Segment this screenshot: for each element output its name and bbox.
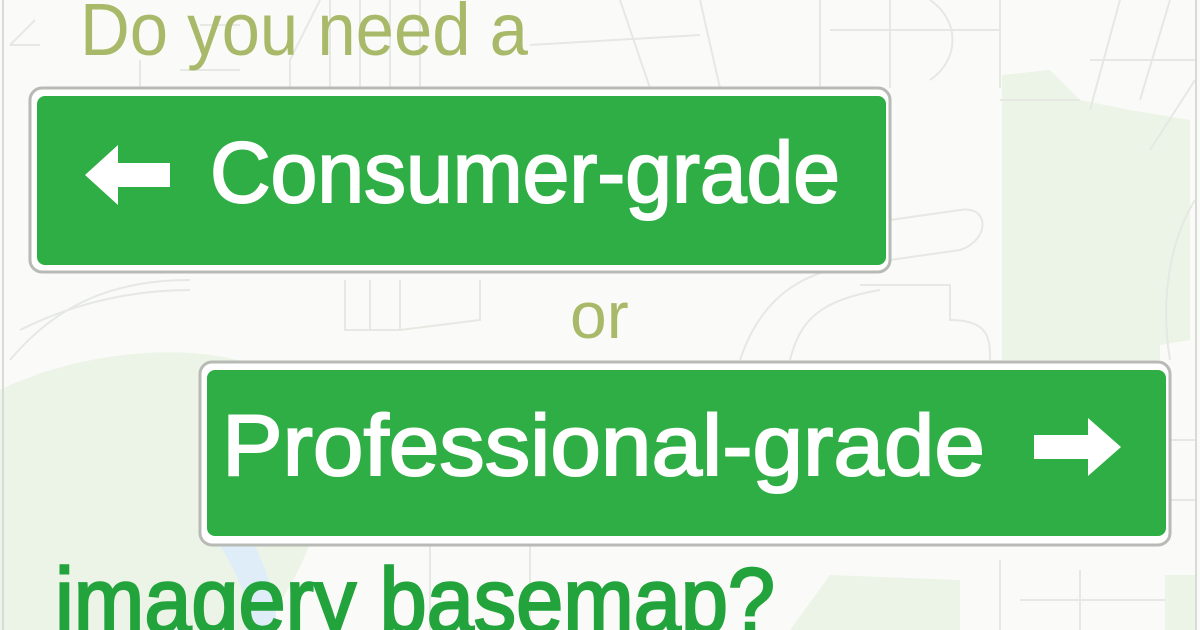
sign: Professional-grade [200, 362, 1170, 545]
sign: Consumer-grade [30, 88, 890, 272]
icon: right arrow [1034, 418, 1121, 476]
text: or: or [570, 278, 629, 352]
sign: Consumer-grade: Consumer-grade [210, 125, 840, 221]
sign: Professional-grade: Professional-grade [222, 398, 985, 494]
icon: left arrow [85, 145, 170, 205]
